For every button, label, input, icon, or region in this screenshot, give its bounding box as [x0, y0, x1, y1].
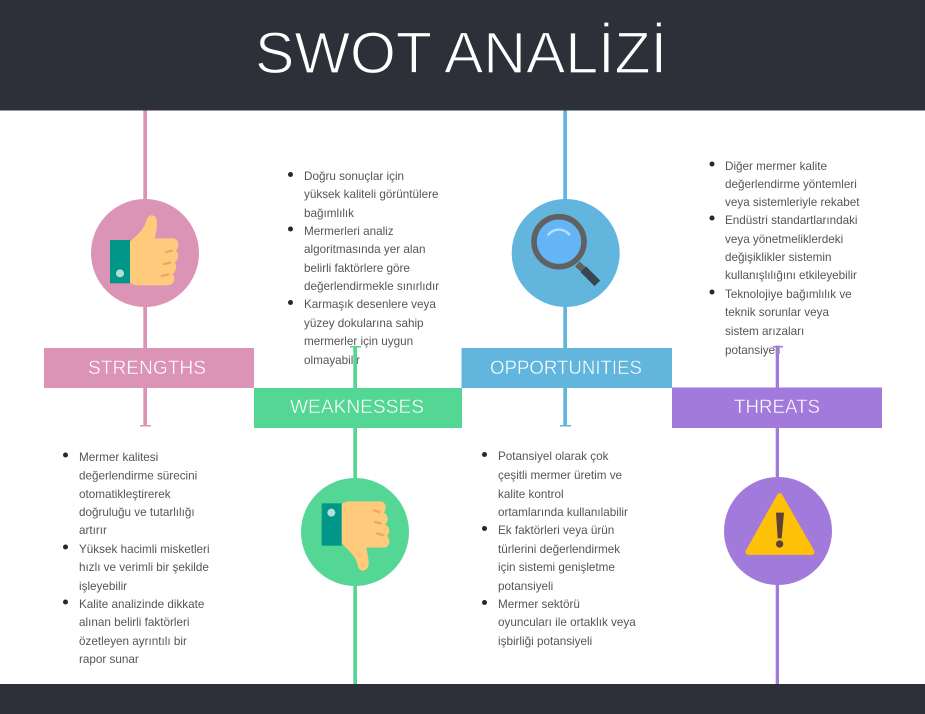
text block: weaknesses: yüksek kaliteli görüntülere	[304, 188, 438, 201]
text block: opportunities: türlerini değerlendirmek	[498, 543, 620, 556]
label: opportunities	[462, 348, 672, 388]
label: weaknesses	[254, 388, 462, 428]
text block: threats: veya sistemleriyle rekabet	[725, 196, 860, 209]
connector: strengths line	[140, 110, 151, 426]
connector: opportunities line	[560, 110, 571, 426]
text block: strengths: otomatikleştirerek	[79, 488, 171, 501]
text block: threats	[710, 160, 860, 357]
text block: threats: Endüstri standartlarındaki	[725, 214, 858, 227]
icon: thumbs down	[301, 478, 409, 586]
connector: weaknesses line	[350, 346, 361, 684]
text block: opportunities: çeşitli mermer üretim ve	[498, 469, 622, 482]
icon: warning triangle	[724, 477, 832, 585]
label: threats	[672, 388, 882, 428]
text block: strengths: Mermer kalitesi	[79, 451, 158, 464]
text block: weaknesses: Mermerleri analiz	[304, 225, 394, 238]
text block: opportunities: oyuncuları ile ortaklık veya	[498, 616, 636, 629]
text block: threats: veya yönetmeliklerdeki	[725, 233, 843, 246]
text block: strengths: rapor sunar	[79, 653, 139, 666]
text block: strengths: Yüksek hacimli misketleri	[79, 543, 210, 556]
text block: opportunities: Mermer sektörü	[498, 598, 580, 611]
text block: opportunities: ortamlarında kullanılabilir	[498, 506, 628, 519]
label: weaknesses: WEAKNESSES	[290, 397, 424, 418]
text block: threats: teknik sorunlar veya	[725, 306, 829, 319]
text block: opportunities	[482, 450, 636, 648]
text block: opportunities: işbirliği potansiyeli	[498, 635, 592, 648]
text block: threats: sistem arızaları	[725, 325, 804, 338]
text block: strengths: doğruluğu ve tutarlılığı	[79, 506, 195, 519]
icon: magnifying glass	[512, 199, 620, 307]
text block: weaknesses: değerlendirmekle sınırlıdır	[304, 280, 439, 293]
text block: strengths: Kalite analizinde dikkate	[79, 598, 204, 611]
text block: threats: Teknolojiye bağımlılık ve	[725, 288, 852, 301]
text block: strengths: özetleyen ayrıntılı bir	[79, 635, 187, 648]
label: strengths	[44, 348, 254, 388]
text block: strengths: alınan belirli faktörleri	[79, 616, 189, 629]
text block: strengths: artırır	[79, 524, 107, 537]
text block: weaknesses: olmayabilir	[304, 354, 360, 367]
text block: opportunities: potansiyeli	[498, 580, 553, 593]
header band	[0, 0, 925, 110]
text block: strengths	[63, 451, 210, 666]
text block: strengths: işleyebilir	[79, 580, 127, 593]
text block: opportunities: Potansiyel olarak çok	[498, 450, 609, 463]
text block: weaknesses	[288, 170, 439, 367]
connector: threats line	[773, 346, 783, 684]
text block: threats: kullanışlılığını etkileyebilir	[725, 269, 857, 282]
text block: threats: Diğer mermer kalite	[725, 160, 827, 173]
text block: weaknesses: mermerler için uygun	[304, 335, 413, 348]
text block: opportunities: Ek faktörleri veya ürün	[498, 524, 614, 537]
label: opportunities: OPPORTUNITIES	[490, 358, 642, 379]
text block: threats: potansiyeli	[725, 344, 780, 357]
text block: weaknesses: belirli faktörlere göre	[304, 262, 410, 275]
text block: threats: değerlendirme yöntemleri	[725, 178, 857, 191]
text block: weaknesses: bağımlılık	[304, 207, 354, 220]
text block: threats: değişiklikler sistemin	[725, 251, 832, 264]
text block: strengths: değerlendirme sürecini	[79, 470, 197, 482]
text block: weaknesses: algoritmasında yer alan	[304, 243, 426, 256]
text block: strengths: hızlı ve verimli bir şekilde	[79, 561, 209, 574]
label: threats: THREATS	[734, 397, 820, 418]
icon: thumbs up	[91, 199, 199, 307]
text block: weaknesses: Doğru sonuçlar için	[304, 170, 404, 183]
title: SWOT ANALİZİ	[255, 21, 667, 86]
footer band	[0, 684, 925, 714]
text block: weaknesses: Karmaşık desenlere veya	[304, 298, 436, 311]
text block: opportunities: kalite kontrol	[498, 488, 564, 501]
text block: weaknesses: yüzey dokularına sahip	[304, 317, 424, 330]
text block: opportunities: için sistemi genişletme	[498, 561, 615, 574]
label: strengths: STRENGTHS	[88, 358, 206, 379]
